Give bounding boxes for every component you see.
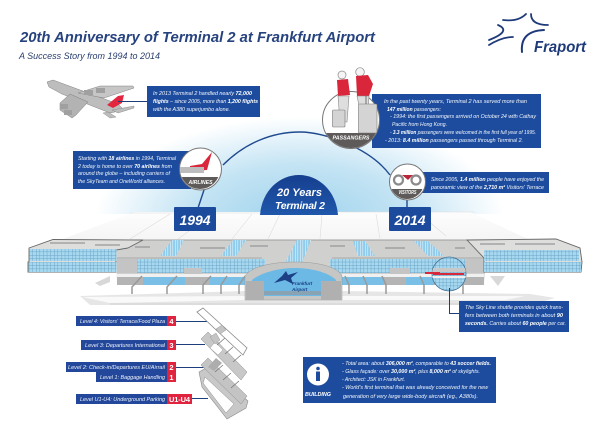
panel: building: generation of very large wide-body aircraft (eg., A380s). — [343, 394, 478, 400]
panel: airlines — [73, 151, 191, 189]
shadow pads — [80, 291, 555, 305]
panel: flights — [147, 86, 260, 117]
panel: passengers: In the past twenty years, Terminal 2 has served more than — [384, 99, 527, 105]
panel: flights: In 2013 Terminal 2 handled nearly 72,000 — [153, 91, 252, 97]
level label: level 1: Level 1: Baggage Handling — [100, 375, 166, 381]
center dome: 20 Years Terminal 2: Terminal 2 — [275, 200, 325, 212]
level label: level 3 — [81, 340, 176, 350]
panel: Sky Line shuttle: fers between both terminals in about 90 — [465, 313, 563, 319]
panel: building — [303, 357, 496, 403]
level label: level 4: Level 4: Visitors' Terrace/Food Plaza — [80, 319, 165, 325]
icon: airlines circle: AIRLINES — [188, 180, 213, 186]
level label: level 2: Level 2: Check-in/Departures EU/Airrail — [68, 365, 166, 371]
panel: passengers: - 1994: the first passengers arrived on October 24 with Cathay — [390, 114, 536, 120]
level label: level 1 — [96, 372, 176, 382]
panel: passengers: 147 million passengers: — [387, 107, 441, 113]
panel: visitors — [420, 172, 549, 193]
panel: passengers: - 3.3 million passengers were welcomed in the first full year of 1995. — [390, 130, 536, 136]
level 2 — [201, 358, 247, 404]
terminal logo — [274, 271, 298, 284]
panel: airlines: 2 today is home to over 70 airlines from — [77, 164, 172, 170]
terminal building illustration: Frankfurt — [292, 281, 313, 286]
year box: 2014: 2014 — [394, 212, 426, 228]
icon: info — [307, 364, 329, 386]
panel: passengers: - 2013: 8.4 million passengers passed through Terminal 2. — [385, 138, 523, 144]
panel: passengers: Pacific from Hong Kong. — [392, 122, 447, 128]
year box: 1994: 1994 — [180, 212, 211, 228]
panel: building: - Glass façade: over 30,000 m², plus 8,000 m² of skylights. — [342, 369, 480, 375]
panel: flights: flights – since 2005, more than 1,200 flights — [153, 99, 258, 105]
logo: Fraport: Fraport — [534, 39, 587, 56]
exploded level diagram — [197, 308, 248, 419]
panel: Sky Line shuttle: seconds. Carries about 60 people per car. — [465, 321, 566, 327]
floor in front of the arc — [60, 212, 530, 240]
level label: level 1: 1 — [169, 373, 174, 382]
glass facades — [117, 259, 265, 273]
level label: level 2: 2 — [169, 363, 174, 372]
level label: level 4 — [76, 316, 176, 326]
main arc connecting the milestones — [223, 132, 390, 175]
panel: building: - World's first terminal that was already conceived for the new — [342, 385, 489, 391]
level 3 — [201, 332, 247, 380]
panel: visitors: panoramic view of the 2,710 m² Visitors' Terrace — [430, 185, 544, 191]
title: 20th Anniversary of Terminal 2 at Frankfurt Airport — [19, 30, 376, 46]
center dome: 20 Years Terminal 2: 20 Years — [276, 187, 322, 199]
connector: plane to panel — [118, 100, 147, 102]
panel: passengers — [372, 94, 541, 148]
panel: building: - Architect: JSK in Frankfurt. — [342, 377, 405, 383]
left wing — [28, 240, 143, 272]
connectors from circles to year boxes — [198, 190, 407, 208]
central roof — [116, 240, 486, 283]
icon: visitors circle — [390, 164, 426, 201]
panel: Sky Line shuttle — [459, 301, 569, 332]
level label: level 2 — [66, 362, 176, 372]
icon: airlines circle — [180, 148, 222, 191]
level label: underground parking: Level U1-U4: Underground Parking — [80, 397, 166, 403]
road edge — [110, 303, 530, 305]
level label: level 3: 3 — [169, 341, 174, 350]
panel: flights: with the A380 superjumbo alone. — [153, 107, 230, 113]
icon: passengers circle — [322, 68, 380, 150]
subtitle: A Success Story from 1994 to 2014 — [18, 51, 160, 62]
parking — [199, 367, 248, 419]
panel: building: BUILDING — [305, 392, 331, 398]
level label: underground parking — [76, 394, 192, 404]
background glow behind the arc — [90, 110, 510, 214]
skylights — [160, 240, 444, 265]
logo: Fraport — [489, 14, 587, 56]
level label: level 3: Level 3: Departures International — [85, 343, 166, 349]
terminal building illustration — [28, 239, 582, 305]
level 4 — [197, 308, 247, 355]
central entrance hall — [245, 262, 342, 300]
panel: airlines: the SkyTeam and OneWorld alliances. — [78, 179, 165, 185]
icon: visitors circle: VISITORS — [398, 190, 417, 196]
level label: underground parking: U1-U4 — [169, 395, 191, 404]
panel: airlines: Starting with 18 airlines in 1994, Terminal — [78, 156, 177, 162]
center dome: 20 Years Terminal 2 — [260, 175, 338, 215]
right wing — [467, 239, 582, 272]
panel: Sky Line shuttle: The Sky Line shuttle provides quick trans- — [465, 305, 563, 311]
panel: visitors: Since 2005, 1.4 million people have enjoyed the — [431, 177, 544, 183]
callout circle: Sky Line shuttle — [425, 257, 470, 291]
icon: A380 airplane — [47, 80, 134, 118]
year box: 1994 — [174, 207, 216, 231]
level label: level 4: 4 — [169, 317, 174, 326]
pillars — [132, 276, 463, 294]
panel: building: - Total area: about 306,000 m², comparable to 43 soccer fields. — [342, 361, 491, 367]
panel: airlines: around the globe – including carriers of — [78, 171, 170, 177]
connector: Sky Line callout — [450, 288, 460, 314]
year box: 2014 — [389, 207, 431, 231]
lower level — [117, 274, 247, 277]
level connectors — [176, 322, 208, 398]
terminal building illustration: Airport — [291, 287, 308, 292]
icon: passengers circle: PASSANGERS — [332, 136, 370, 142]
